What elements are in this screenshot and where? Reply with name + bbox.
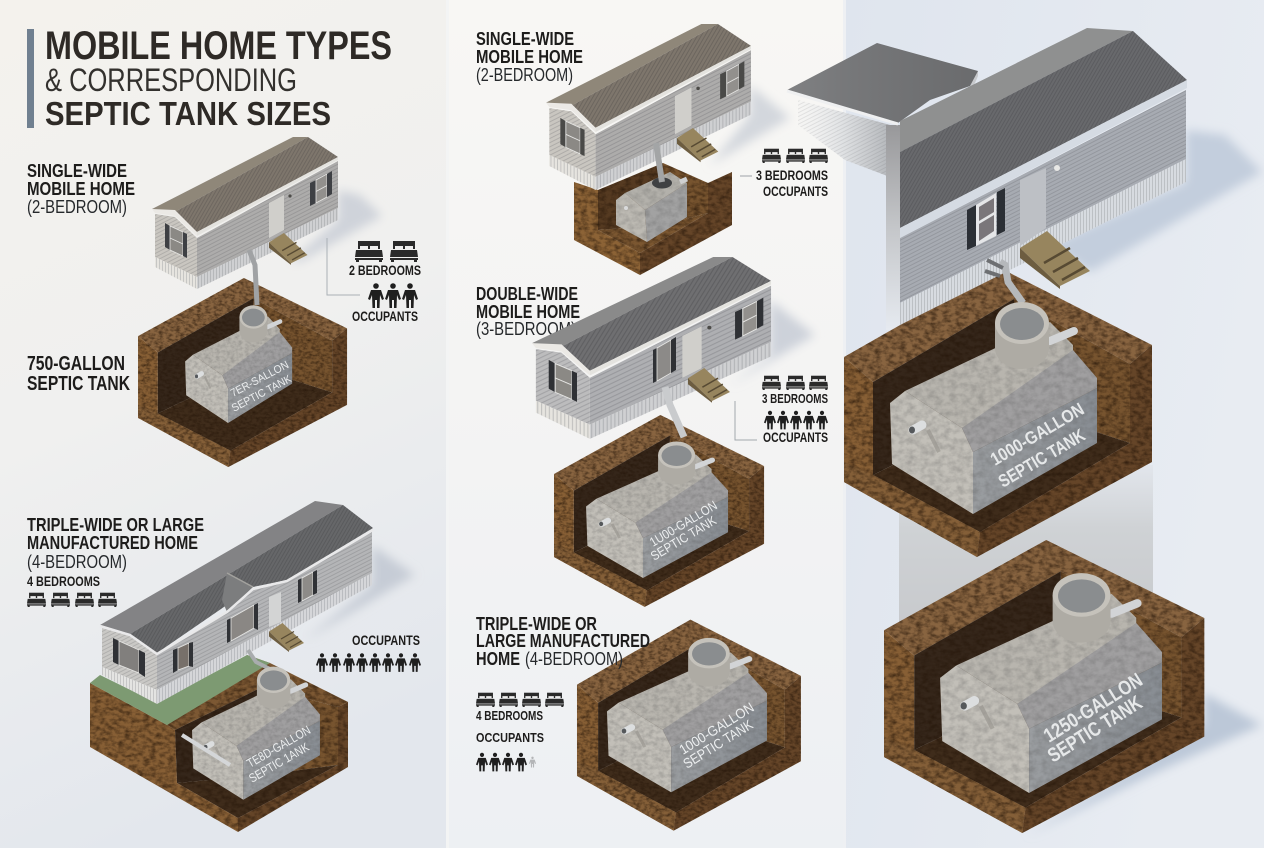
- panel: mobile home overview column: [27, 24, 421, 832]
- label: double-wide 3-bedroom: [476, 284, 580, 339]
- title block: SEPTIC TANK SIZES: [45, 95, 331, 132]
- callout: 2 bedrooms and occupants: 2 BEDROOMS: [349, 263, 421, 278]
- callout: 3 bedrooms: [740, 149, 828, 199]
- label: single-wide 2-bedroom: [476, 29, 583, 85]
- house shadow: [1050, 130, 1262, 272]
- grass strip: [90, 655, 270, 725]
- septic tank: triple-wide: SEPTIC 1ANK: [246, 740, 312, 786]
- label: triple-wide 4-bedroom: TRIPLE-WIDE OR LARGE: [27, 515, 204, 535]
- label: triple-wide 4-bedroom: HOME: [476, 649, 520, 669]
- label: single-wide 2-bedroom: MOBILE HOME: [476, 47, 583, 67]
- soil pit: 1000-gallon: [844, 268, 1152, 557]
- label: triple-wide 4-bedroom: (4-BEDROOM): [525, 649, 623, 669]
- septic tank: 1250-gallon: [940, 573, 1162, 793]
- label: triple-wide 4-bedroom: TRIPLE-WIDE OR: [476, 614, 597, 634]
- overlapping roof from neighbouring home: [787, 43, 978, 330]
- callout: 2 bedrooms and occupants: [327, 238, 421, 324]
- house: triple-wide with dormer: [100, 501, 373, 704]
- callout: 3 bedrooms and occupants: [735, 376, 828, 445]
- label: double-wide 3-bedroom: DOUBLE-WIDE: [476, 284, 578, 304]
- label: single-wide 2-bedroom: [27, 161, 135, 217]
- soil pit: single-wide: [574, 163, 732, 275]
- house shadow: [290, 190, 382, 262]
- callout: 3 bedrooms and occupants: OCCUPANTS: [763, 430, 828, 445]
- house: single-wide: [546, 24, 751, 190]
- label: triple-wide 4-bedroom: [27, 515, 204, 572]
- septic tank: single-wide: [616, 143, 687, 242]
- soil pit: triple-wide: [577, 620, 801, 831]
- label: 750-gallon septic tank: 750-GALLON: [27, 353, 125, 375]
- title block: & CORRESPONDING: [45, 62, 297, 98]
- septic tank: 1000-gallon, enlarged: 1000-GALLON: [987, 399, 1088, 469]
- house: enlarged: [900, 28, 1187, 325]
- septic tank: 1000-gallon, double-wide: 1U00-GALLON: [647, 498, 720, 550]
- soil pit: double-wide: [554, 415, 764, 607]
- label: single-wide 2-bedroom: (2-BEDROOM): [27, 197, 127, 217]
- callout: occupants row: OCCUPANTS: [352, 633, 420, 648]
- callout: 3 bedrooms: 3 BEDROOMS: [756, 168, 828, 183]
- grey backdrop behind lower tank: [899, 465, 1153, 645]
- septic tank: 1000-gallon, enlarged: SEPTIC TANK: [995, 425, 1089, 491]
- label: single-wide 2-bedroom: (2-BEDROOM): [476, 65, 573, 85]
- septic tank: 750-gallon: SEPTIC TANK: [230, 373, 294, 415]
- title block: MOBILE HOME TYPES: [45, 24, 392, 68]
- soil pit: 1250-gallon: [884, 540, 1204, 833]
- callout: 4 bedrooms: [27, 574, 117, 607]
- house: double-wide: [532, 257, 771, 439]
- label: double-wide 3-bedroom: MOBILE HOME: [476, 302, 580, 322]
- label: single-wide 2-bedroom: MOBILE HOME: [27, 179, 135, 199]
- label: triple-wide 4-bedroom: (4-BEDROOM): [27, 552, 127, 572]
- label: triple-wide 4-bedroom: [476, 614, 650, 669]
- callout: 4 bedrooms and occupants: 4 BEDROOMS: [476, 709, 543, 723]
- septic tank: 750-gallon: 7ER-SALLON: [229, 359, 291, 400]
- septic tank: triple-wide: TE8D-GALLON: [244, 723, 313, 771]
- septic tank: 1000-gallon, double-wide: SEPTIC TANK: [648, 512, 719, 564]
- label: 750-gallon septic tank: SEPTIC TANK: [27, 373, 130, 395]
- septic tank: 1000-gallon, enlarged: [890, 302, 1097, 514]
- callout: 4 bedrooms and occupants: [476, 693, 564, 771]
- callout: occupants row: [316, 633, 421, 672]
- soil pit: triple-wide: [90, 655, 348, 832]
- label: single-wide 2-bedroom: SINGLE-WIDE: [476, 29, 574, 49]
- callout: 4 bedrooms and occupants: OCCUPANTS: [476, 730, 544, 745]
- label: triple-wide 4-bedroom: LARGE MANUFACTURED: [476, 631, 650, 651]
- soil pit: 750-gallon: [138, 278, 347, 467]
- septic tank: 1000-gallon, triple-wide: SEPTIC TANK: [680, 716, 756, 772]
- septic tank: triple-wide: [182, 667, 320, 800]
- septic tank: 1250-gallon: 1250-GALLON: [1040, 669, 1147, 747]
- septic tank: 1250-gallon: SEPTIC TANK: [1044, 692, 1147, 767]
- septic tank: 1000-gallon, double-wide: [586, 441, 728, 578]
- septic tank: 1000-gallon, triple-wide: [607, 638, 767, 792]
- title block: [27, 24, 392, 132]
- pit shadow: [1027, 693, 1262, 835]
- label: triple-wide 4-bedroom: MANUFACTURED HOME: [27, 533, 198, 553]
- callout: 4 bedrooms: 4 BEDROOMS: [27, 574, 100, 589]
- house: single-wide: [152, 137, 338, 305]
- panel: middle column: [476, 24, 828, 831]
- house shadow: [730, 300, 815, 385]
- callout: 3 bedrooms and occupants: 3 BEDROOMS: [762, 391, 828, 406]
- callout: 2 bedrooms and occupants: OCCUPANTS: [352, 309, 418, 324]
- panel: enlarged detail column: [787, 28, 1262, 835]
- septic tank: 750-gallon: [185, 305, 294, 423]
- callout: 3 bedrooms: OCCUPANTS: [763, 184, 828, 199]
- septic tank: 1000-gallon, triple-wide: 1000-GALLON: [676, 699, 757, 758]
- house shadow: [710, 85, 790, 165]
- label: 750-gallon septic tank: [27, 353, 130, 395]
- label: single-wide 2-bedroom: SINGLE-WIDE: [27, 161, 127, 181]
- house shadow: [305, 545, 415, 640]
- label: double-wide 3-bedroom: (3-BEDROOM): [476, 319, 576, 339]
